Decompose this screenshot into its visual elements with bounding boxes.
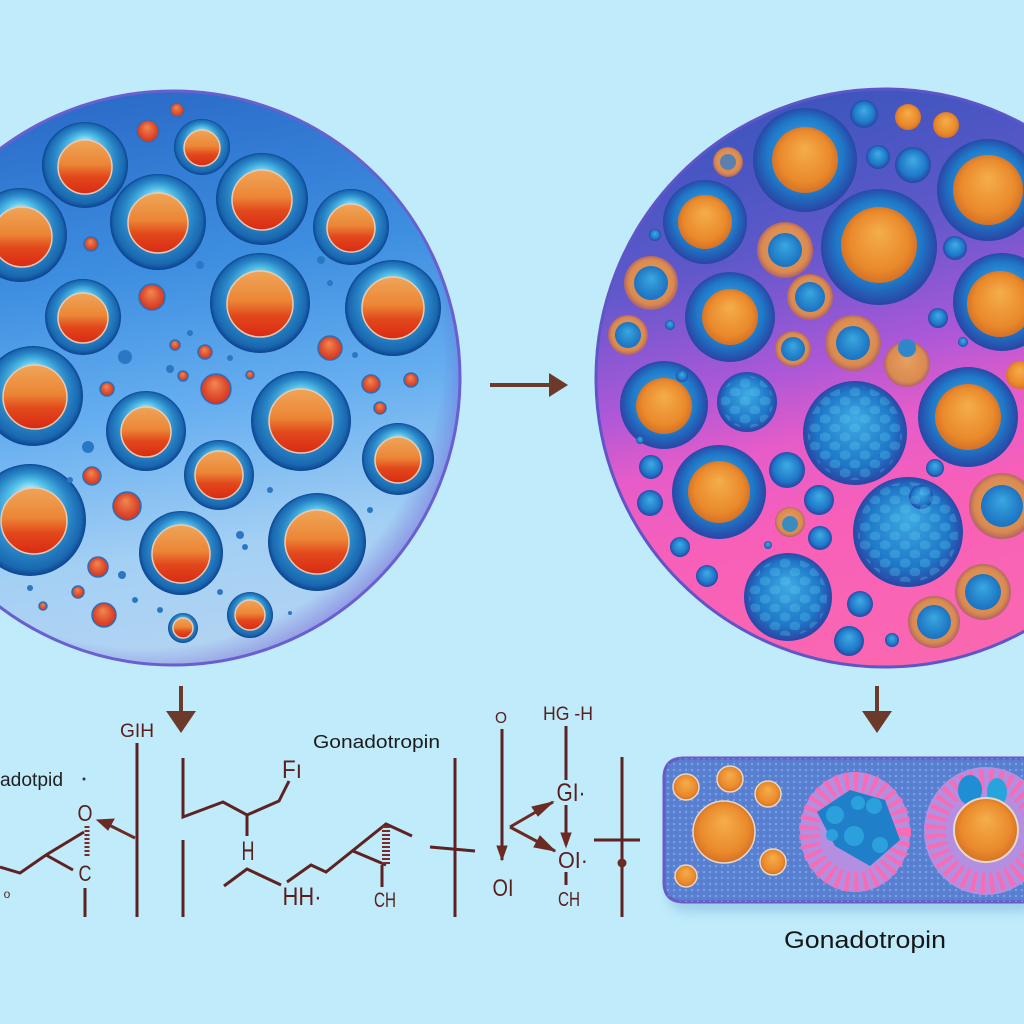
panel: right disc of cells (596, 89, 1024, 667)
pink follicle with blue cluster (800, 772, 910, 892)
label: Gonadotropin small: Gonadotropin (313, 732, 440, 752)
right disc small orange vesicles (895, 104, 1024, 389)
scale texture on big blue cells (721, 376, 958, 636)
right disc plain blue cells (636, 100, 968, 656)
left disc small red vesicles (39, 103, 418, 627)
label dot (82, 778, 86, 780)
chemical structure diagram (0, 704, 640, 917)
left disc body (0, 91, 460, 665)
atoms right: OI (492, 875, 514, 902)
label: Gonadotropin: Gonadotropin (784, 927, 946, 954)
hatched bonds (87, 826, 386, 865)
atoms right: OI· (558, 847, 588, 873)
atoms right: O (495, 710, 507, 727)
atoms left: O (78, 800, 92, 826)
atoms right: CH (558, 889, 580, 911)
right disc body (596, 89, 1024, 667)
pink follicle with orange oocyte (924, 767, 1024, 895)
left disc large cells (0, 119, 441, 643)
panel: left disc of cells (0, 91, 460, 665)
atoms right: GI· (556, 779, 586, 807)
atoms middle: H (242, 836, 254, 866)
strip body (664, 758, 1024, 902)
atoms middle (242, 756, 396, 912)
left disc small blue vesicles (27, 256, 373, 615)
right disc orange-ringed blue cells (608, 147, 1024, 648)
atoms middle: HH· (282, 883, 322, 911)
arrow: right disc down to strip (862, 686, 892, 733)
atoms middle: CH (374, 889, 396, 912)
arrow: left disc to right disc (490, 373, 568, 397)
atoms right: HG -H (543, 704, 593, 725)
panel: tissue strip (664, 758, 1024, 902)
reaction arrows (97, 802, 626, 867)
label: adotpid: adotpid (0, 770, 63, 791)
strip texture (664, 758, 1024, 902)
orange vesicles (673, 766, 786, 887)
right disc cells with orange centres (620, 108, 1024, 539)
strip drop shadow (668, 780, 1024, 912)
atoms left: C (78, 861, 92, 886)
atoms left (4, 721, 154, 901)
arrow: left disc down to structures (166, 686, 196, 733)
atoms left: o (4, 887, 11, 901)
bonds (0, 726, 640, 917)
atoms middle: Fı (282, 756, 302, 784)
atoms right (492, 704, 593, 911)
atoms left: GIH (120, 721, 154, 742)
left disc purple edge shading (0, 92, 459, 664)
